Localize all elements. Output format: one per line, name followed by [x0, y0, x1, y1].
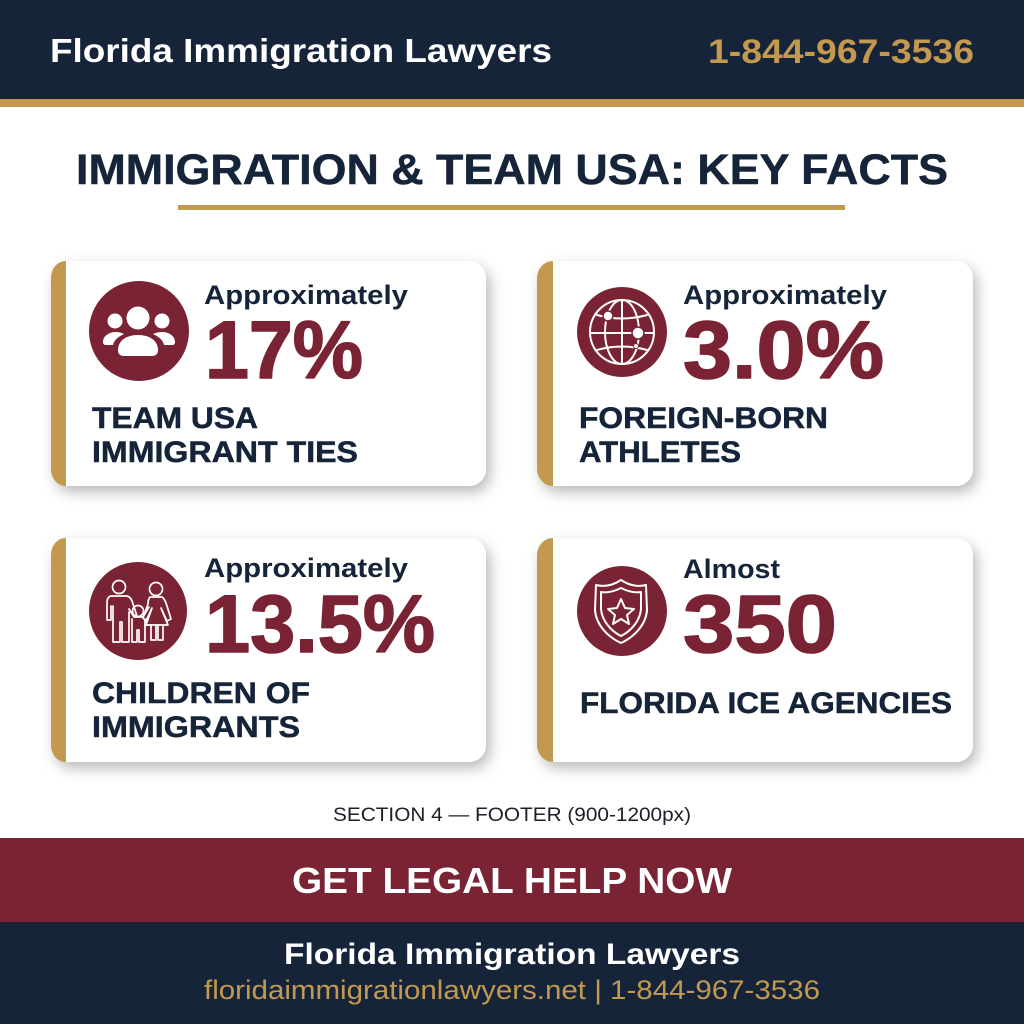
panel: children of immigrants — [51, 538, 486, 762]
label — [579, 402, 828, 469]
header firm name: Florida Immigration Lawyers — [50, 32, 552, 69]
label: ATHLETES — [579, 436, 741, 469]
label: FOREIGN-BORN — [579, 402, 828, 435]
qualifier: Approximately — [204, 553, 408, 583]
statistic: 350 — [683, 579, 837, 670]
header phone number: 1-844-967-3536 — [708, 33, 974, 71]
qualifier: Almost — [683, 554, 780, 584]
icon: family — [89, 562, 187, 660]
icon: globe — [577, 287, 667, 377]
header bar — [0, 0, 1024, 107]
panel: foreign-born athletes — [537, 261, 973, 486]
label: TEAM USA — [92, 402, 258, 435]
label — [92, 677, 310, 744]
section caption: SECTION 4 — FOOTER (900-1200px) — [333, 805, 691, 826]
panel: team usa immigrant ties — [51, 261, 486, 486]
label — [92, 402, 358, 469]
icon: badge — [577, 566, 667, 656]
label: IMMIGRANTS — [92, 711, 300, 744]
qualifier: Approximately — [683, 280, 887, 310]
label: CHILDREN OF — [92, 677, 310, 710]
title: IMMIGRATION & TEAM USA: KEY FACTS — [76, 146, 948, 194]
statistic: 3.0% — [683, 305, 884, 396]
panel: florida ice agencies — [537, 538, 973, 762]
footer contact details: floridaimmigrationlawyers.net | 1-844-967-3536 — [204, 975, 820, 1005]
statistic: 13.5% — [205, 579, 435, 670]
label: IMMIGRANT TIES — [92, 436, 358, 469]
call to action band: GET LEGAL HELP NOW — [292, 860, 732, 901]
statistic: 17% — [205, 305, 363, 396]
call to action band — [0, 838, 1024, 922]
footer firm name: Florida Immigration Lawyers — [284, 938, 740, 971]
icon: group of people — [89, 281, 189, 381]
footer — [0, 922, 1024, 1024]
qualifier: Approximately — [204, 280, 408, 310]
label: FLORIDA ICE AGENCIES — [580, 687, 952, 720]
